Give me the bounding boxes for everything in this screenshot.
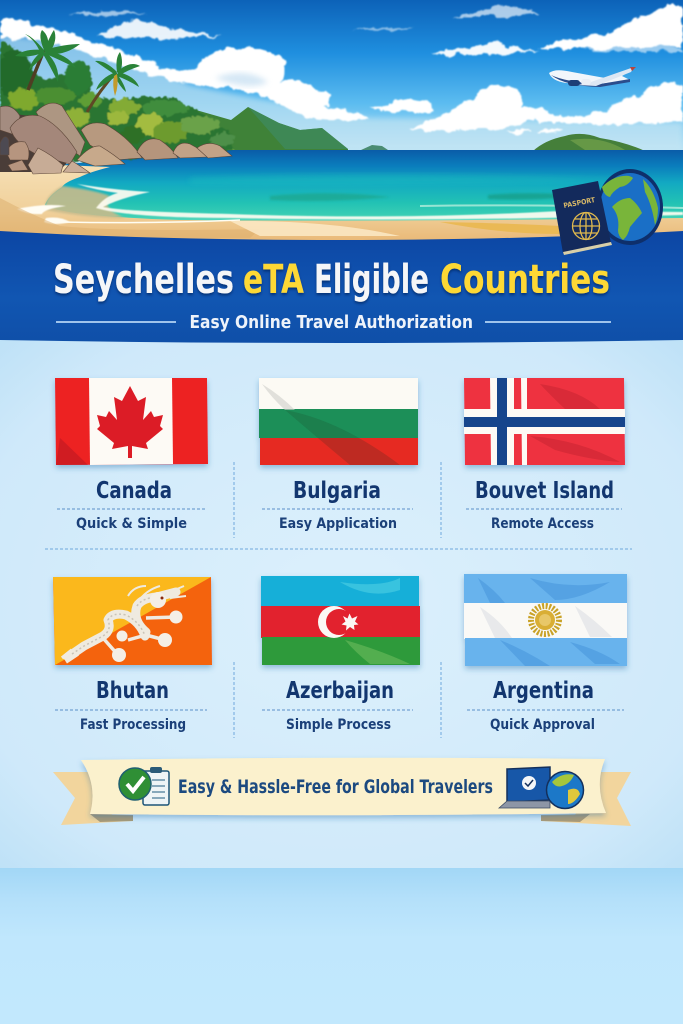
cloud shading — [215, 73, 268, 86]
lower background — [0, 868, 683, 1024]
name: Bhutan — [96, 678, 169, 704]
subtitle rule right — [485, 321, 611, 323]
name: Bouvet Island — [475, 478, 614, 504]
page background — [0, 340, 683, 870]
name: Argentina — [493, 678, 594, 704]
sea highlights — [190, 174, 683, 208]
benefit: Easy Application — [279, 516, 397, 532]
name: Azerbaijan — [286, 678, 394, 704]
ribbon tails — [53, 772, 631, 826]
horizon haze — [0, 35, 683, 152]
sand — [0, 162, 683, 245]
flag: Argentina — [464, 574, 627, 666]
flag: Canada — [55, 378, 208, 465]
title: eTA — [243, 257, 304, 303]
hills and distant islands — [100, 98, 653, 158]
clouds — [0, 4, 683, 134]
icon: laptop and globe — [499, 767, 584, 808]
card: Bulgaria — [259, 378, 418, 532]
title: Seychelles — [53, 257, 234, 303]
benefit: Quick & Simple — [76, 516, 187, 532]
passport and globe icon — [552, 169, 663, 255]
title: Eligible — [314, 257, 429, 303]
card: Canada — [55, 378, 208, 532]
sea — [0, 150, 683, 228]
granite boulders — [0, 103, 232, 174]
benefit: Fast Processing — [80, 717, 186, 733]
airplane — [549, 67, 636, 87]
card: Bouvet Island — [464, 378, 625, 532]
icon: checklist — [119, 767, 169, 805]
benefit: Simple Process — [286, 717, 391, 733]
name: Canada — [96, 478, 172, 504]
banner text: Easy & Hassle-Free for Global Travelers — [178, 776, 493, 798]
flag: Azerbaijan — [261, 576, 420, 665]
ribbon body — [81, 758, 606, 815]
flag: Bouvet Island — [464, 378, 625, 465]
ribbon banner — [53, 758, 631, 826]
benefit: Quick Approval — [490, 717, 595, 733]
benefit: Remote Access — [491, 516, 594, 532]
card: Bhutan — [53, 577, 212, 733]
palm trees — [15, 30, 140, 112]
foreground forest — [0, 42, 234, 165]
flag: Bhutan — [53, 577, 212, 665]
title band — [0, 231, 683, 343]
subtitle: Easy Online Travel Authorization — [190, 312, 473, 333]
sky — [0, 0, 683, 152]
title — [53, 257, 610, 303]
flag: Bulgaria — [259, 378, 418, 465]
passport label: PASPORT — [563, 196, 596, 210]
beach scene illustration — [0, 0, 683, 245]
card: Azerbaijan — [261, 576, 420, 733]
card: Argentina — [464, 574, 627, 733]
subtitle rule left — [56, 321, 176, 323]
title: Countries — [440, 257, 610, 303]
name: Bulgaria — [293, 478, 381, 504]
wet sand and foam — [0, 184, 683, 238]
